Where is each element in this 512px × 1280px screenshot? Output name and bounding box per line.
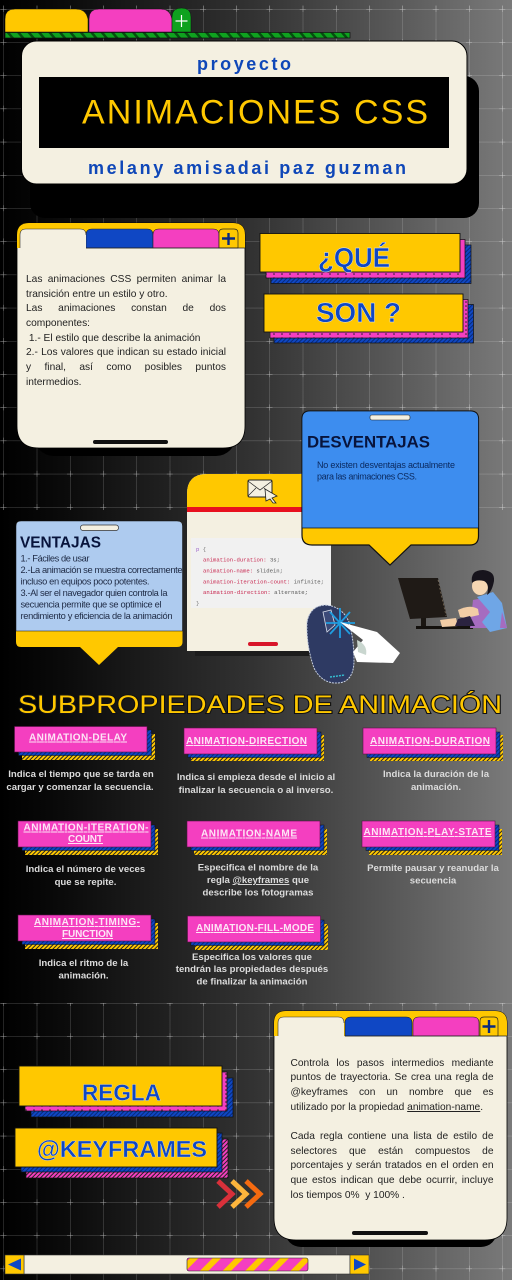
window bar: [248, 642, 278, 646]
property: animation-direction: finalizar la secuencia o al inverso.: [179, 785, 333, 796]
list: secuencia permite que se optimice el: [20, 600, 162, 610]
description text: 1.- El estilo que describe la animación: [29, 333, 200, 344]
left button: [5, 1255, 24, 1274]
tabs: [278, 1017, 507, 1037]
browser tabs top: [5, 8, 350, 38]
code snippet: animation-duration: 3s;: [203, 556, 280, 564]
property: animation-play-state: [362, 821, 502, 886]
property: animation-name: Especifica el nombre de la: [198, 862, 319, 874]
title panel shadow: [30, 76, 479, 218]
description text: que estos indican que debe ocurrir, incluye: [290, 1175, 494, 1186]
property: animation-delay: ANIMATION-DELAY: [29, 732, 127, 744]
property: animation-fill-mode: tendrán las propiedades después: [176, 964, 328, 975]
property: animation-duration: animación.: [411, 782, 461, 793]
description text: @keyframes con un nombre que es: [290, 1087, 494, 1098]
heading: SON ?: SON ?: [316, 297, 401, 328]
code snippet: animation-name: slidein;: [203, 568, 283, 574]
home bar: [93, 440, 168, 444]
description text: los tiempos 0% y 100% .: [290, 1190, 405, 1201]
property: animation-fill-mode: Especifica los valores que: [192, 952, 312, 963]
code snippet: p {: [196, 546, 206, 553]
description text: componentes:: [26, 318, 90, 329]
property: animation-name: ANIMATION-NAME: [201, 828, 297, 840]
panel: keyframes description: [274, 1011, 507, 1247]
description text: y final, así como posibles puntos: [26, 362, 226, 373]
icon: person at computer: [398, 570, 507, 632]
heading: REGLA: [19, 1066, 233, 1117]
heading: subpropiedades de animación: SUBPROPIEDADES DE ANIMACIÓN: [18, 690, 502, 719]
list: rendimiento y eficiencia de la animación: [20, 611, 172, 621]
home bar: [352, 1231, 428, 1235]
property: animation-iteration-count: [18, 821, 158, 888]
text: [317, 460, 455, 482]
property: animation-timing-function: [18, 915, 158, 982]
scrollbar: [5, 1255, 369, 1274]
heading: REGLA: REGLA: [82, 1080, 161, 1106]
property: animation-timing-function: Indica el ritmo de la: [39, 958, 129, 969]
property: animation-timing-function: FUNCTION: [62, 929, 113, 940]
property: animation-name: [187, 821, 327, 898]
description text: Las animaciones constan de dos: [26, 303, 226, 314]
description text: Las animaciones CSS permiten animar la: [26, 274, 226, 285]
pill: [370, 415, 410, 420]
title band: ANIMACIONES CSS: [82, 94, 428, 132]
description text: utilizado por la propiedad animation-name.: [290, 1102, 483, 1113]
title band: [39, 77, 449, 148]
property: animation-timing-function: animación.: [58, 970, 109, 982]
panel: desventajas: [302, 411, 478, 565]
code snippet: [191, 538, 331, 608]
heading: @KEYFRAMES: [15, 1128, 228, 1178]
list: 3.-Al ser el navegador quien controla la: [20, 588, 168, 598]
list: 2.-La animación se muestra correctamente: [20, 565, 182, 575]
scroll thumb: [187, 1258, 308, 1271]
property: animation-delay: Indica el tiempo que se tarda en: [8, 769, 154, 780]
description text: transición entre un estilo y otro.: [26, 289, 168, 300]
card body: [17, 223, 245, 448]
panel shadow: [34, 300, 236, 456]
pill: [80, 525, 118, 530]
description text: selectores que están compuestos de: [290, 1146, 494, 1157]
subtitle: proyecto: proyecto: [197, 54, 291, 74]
heading: @KEYFRAMES: @KEYFRAMES: [37, 1136, 207, 1162]
property: animation-direction: [177, 728, 335, 796]
property: animation-direction: ANIMATION-DIRECTION: [186, 736, 307, 747]
title panel: [22, 41, 479, 218]
panel shadow: [285, 1100, 497, 1247]
property: animation-name: regla @keyframes que: [207, 875, 309, 886]
property: animation-timing-function: ANIMATION-TIMING-: [34, 917, 140, 928]
description text: Cada regla contiene una lista de estilo de: [290, 1131, 494, 1142]
icon: envelope with cursor: [248, 480, 277, 503]
code snippet: }: [196, 600, 199, 607]
title card: [22, 41, 467, 184]
property: animation-play-state: Permite pausar y reanudar la: [367, 863, 500, 874]
list: 1.- Fáciles de usar: [20, 554, 90, 564]
description text: puntos de trayectoria. Se crea una regla de: [290, 1072, 494, 1083]
description text: Controla los pasos intermedios mediante: [290, 1058, 494, 1068]
property: animation-iteration-count: que se repite.: [55, 877, 116, 888]
code snippet: animation-iteration-count: infinite;: [203, 578, 324, 586]
bubble: [302, 411, 478, 565]
property: animation-iteration-count: COUNT: [68, 834, 103, 845]
tabs: [20, 229, 245, 249]
list: [20, 554, 182, 621]
panel: browser window with code: [187, 474, 335, 656]
mouse: [307, 605, 354, 683]
property: animation-fill-mode: [176, 916, 328, 988]
bubble: [16, 521, 182, 665]
panel: what are CSS animations: [17, 223, 245, 456]
text: para las animaciones CSS.: [317, 472, 417, 482]
description text: [290, 1056, 494, 1206]
description text: 2.- Los valores que indican su estado inicial: [26, 347, 226, 358]
description text: intermedios.: [26, 377, 82, 388]
heading: VENTAJAS: [20, 534, 101, 552]
heading: ¿QUÉ: ¿QUÉ: [318, 242, 390, 273]
property: animation-delay: [6, 726, 155, 793]
property: animation-iteration-count: ANIMATION-ITERATION-: [24, 822, 148, 834]
property: animation-fill-mode: de finalizar la animación: [197, 976, 308, 988]
property: animation-direction: Indica si empieza desde el inicio al: [177, 772, 335, 783]
window body: [187, 474, 331, 651]
hand: [340, 622, 400, 663]
description text: porcentajes y serán tratados en el orden en: [290, 1160, 494, 1171]
author name: melany amisadai paz guzman: [88, 158, 406, 178]
property: animation-fill-mode: ANIMATION-FILL-MODE: [196, 923, 314, 934]
heading: SON ?: [264, 294, 474, 343]
card body: [274, 1011, 507, 1240]
property: animation-duration: Indica la duración de la: [383, 769, 490, 780]
property: animation-play-state: ANIMATION-PLAY-STATE: [364, 827, 492, 838]
list: incluso en equipos poco potentes.: [20, 576, 150, 586]
heading: DESVENTAJAS: [307, 434, 430, 452]
icon: mouse with clicking hand: [307, 605, 400, 683]
arrows: [218, 1181, 260, 1207]
click burst: [326, 608, 355, 638]
heading: ¿QUÉ: [260, 234, 471, 284]
property: animation-duration: [363, 728, 503, 793]
code snippet: animation-direction: alternate;: [203, 589, 308, 596]
property: animation-delay: cargar y comenzar la secuencia.: [6, 782, 154, 793]
window shadow: [195, 640, 335, 656]
property: animation-name: describe los fotogramas: [203, 888, 313, 898]
description text: [26, 273, 226, 398]
property: animation-play-state: secuencia: [410, 876, 457, 886]
text: No existen desventajas actualmente: [317, 460, 455, 470]
property: animation-duration: ANIMATION-DURATION: [370, 736, 490, 747]
property: animation-iteration-count: Indica el número de veces: [26, 864, 145, 875]
panel: ventajas: [16, 521, 182, 665]
right button: [350, 1255, 369, 1274]
